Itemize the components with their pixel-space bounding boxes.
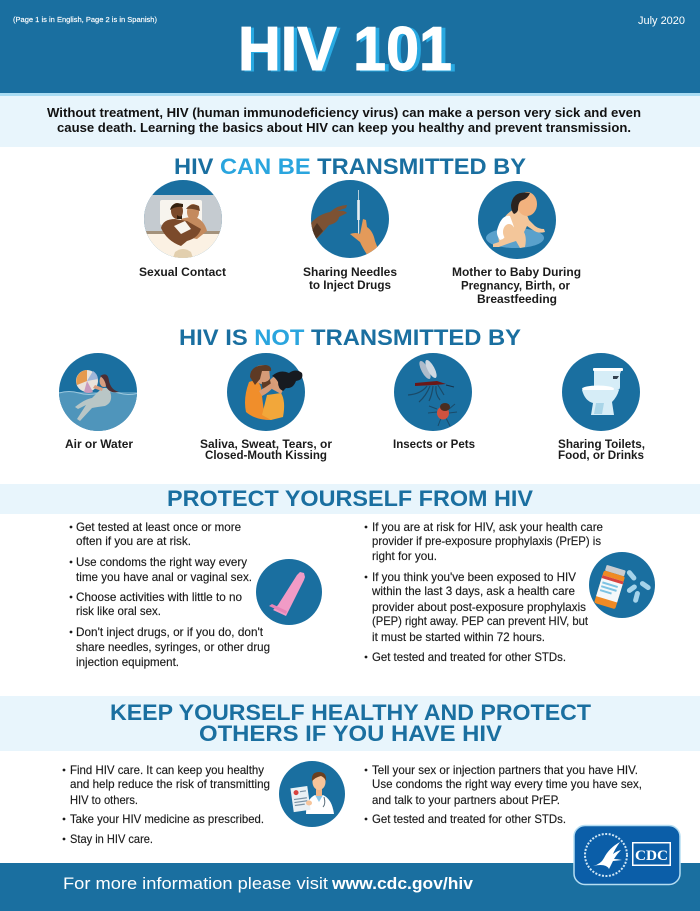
icon: needles	[306, 180, 389, 259]
icon: toilet	[562, 353, 640, 431]
bullet list: protect right: it must be started within 72 hours.	[372, 630, 545, 644]
bullet list: protect right	[365, 520, 603, 664]
bullet list: protect right: (PEP) right away. PEP can prevent HIV, but	[372, 614, 589, 628]
language note: (Page 1 is in English, Page 2 is in Spanish)	[13, 15, 157, 24]
bullet list: keep left: Find HIV care. It can keep you healthy	[70, 763, 264, 777]
bullet list: keep left: Take your HIV medicine as prescribed.	[70, 812, 264, 826]
bullet list: keep right	[365, 763, 642, 826]
bullet list: protect right: right for you.	[372, 549, 437, 563]
heading band: keep yourself healthy	[0, 696, 700, 751]
label: toilets: Sharing Toilets,	[558, 437, 645, 451]
icon: air or water	[59, 353, 139, 432]
intro text band	[0, 93, 700, 147]
label: toilets: Food, or Drinks	[558, 448, 644, 462]
bullet list: protect left: Get tested at least once or more	[76, 520, 241, 534]
icon: kissing	[227, 353, 305, 431]
label: sharing needles: to Inject Drugs	[309, 278, 391, 292]
bullet list: protect right: provider if pre-exposure prophylaxis (PrEP) is	[372, 534, 601, 548]
title: HIV 101	[241, 16, 456, 85]
icon: sexual contact	[144, 180, 222, 260]
bullet list: keep right: and talk to your partners about PrEP.	[372, 793, 560, 807]
label: saliva	[200, 437, 332, 462]
label: saliva: Closed-Mouth Kissing	[205, 448, 327, 462]
label: sharing needles	[303, 265, 397, 292]
bullet list: protect left: often if you are at risk.	[76, 534, 191, 548]
bullet list: protect right: provider about post-exposure prophylaxis	[372, 600, 586, 614]
title: HIV 101	[238, 15, 452, 84]
label: mother to baby	[452, 265, 581, 306]
logo: HHS and CDC: CDC	[635, 848, 668, 864]
date: July 2020	[638, 15, 685, 27]
bullet list: keep left	[63, 763, 270, 846]
intro text band: Without treatment, HIV (human immunodeficiency virus) can make a person very sick and even	[47, 106, 641, 120]
bullet list: protect left: Don't inject drugs, or if you do, don't	[76, 625, 264, 639]
icon: insects	[394, 353, 472, 431]
bullet list: keep right: Tell your sex or injection partners that you have HIV.	[372, 763, 638, 777]
bullet list: keep left: and help reduce the risk of transmitting	[70, 777, 270, 791]
bullet list: protect left	[70, 520, 270, 669]
label: mother to baby: Breastfeeding	[477, 292, 557, 306]
label: saliva: Saliva, Sweat, Tears, or	[200, 437, 332, 451]
bullet list: protect left: Choose activities with little to no	[76, 590, 242, 604]
footer banner: www.cdc.gov/hiv	[331, 874, 474, 893]
bullet list: keep right: Get tested and treated for other STDs.	[372, 812, 566, 826]
heading band: protect yourself	[0, 484, 700, 514]
footer banner: For more information please visit	[63, 874, 328, 893]
icon: condom	[256, 559, 322, 625]
bullet list: protect right: within the last 3 days, ask a health care	[371, 584, 575, 598]
heading: can be transmitted: HIV CAN BE TRANSMITTED BY	[174, 154, 526, 179]
label: insects: Insects or Pets	[393, 437, 475, 451]
label: sexual contact: Sexual Contact	[139, 265, 226, 279]
intro text band: cause death. Learning the basics about HIV can keep you healthy and prevent transmission.	[57, 121, 631, 135]
bullet list: protect left: share needles, syringes, or other drug	[76, 640, 270, 654]
bullet list: protect left: risk like oral sex.	[76, 604, 161, 618]
bullet list: protect left: time you have anal or vaginal sex.	[76, 570, 252, 584]
bullet list: protect right: If you think you've been exposed to HIV	[372, 570, 576, 584]
bullet list: protect right: If you are at risk for HIV, ask your health care	[372, 520, 603, 534]
logo: HHS and CDC	[574, 826, 680, 884]
label: mother to baby: Mother to Baby During	[452, 265, 581, 279]
heading: not transmitted: HIV IS NOT TRANSMITTED BY	[179, 325, 521, 350]
header banner	[0, 0, 700, 93]
heading band: keep yourself healthy: KEEP YOURSELF HEALTHY AND PROTECT	[110, 700, 592, 725]
icon: pills	[589, 552, 655, 618]
heading band: keep yourself healthy: OTHERS IF YOU HAVE HIV	[199, 721, 502, 746]
bullet list: keep right: Use condoms the right way every time you have sex,	[372, 777, 642, 791]
label: mother to baby: Pregnancy, Birth, or	[461, 278, 570, 292]
bullet list: keep left: HIV to others.	[70, 793, 138, 807]
footer banner	[0, 863, 700, 911]
bullet list: protect right: Get tested and treated for other STDs.	[372, 650, 566, 664]
label: sharing needles: Sharing Needles	[303, 265, 397, 279]
icon: baby	[478, 181, 556, 259]
bullet list: protect left: injection equipment.	[76, 655, 179, 669]
icon: doctor	[279, 761, 345, 827]
bullet list: protect left: Use condoms the right way every	[76, 555, 247, 569]
label: toilets	[558, 437, 645, 462]
label: air or water: Air or Water	[65, 437, 133, 451]
bullet list: keep left: Stay in HIV care.	[70, 832, 153, 846]
heading band: protect yourself: PROTECT YOURSELF FROM HIV	[167, 486, 533, 511]
